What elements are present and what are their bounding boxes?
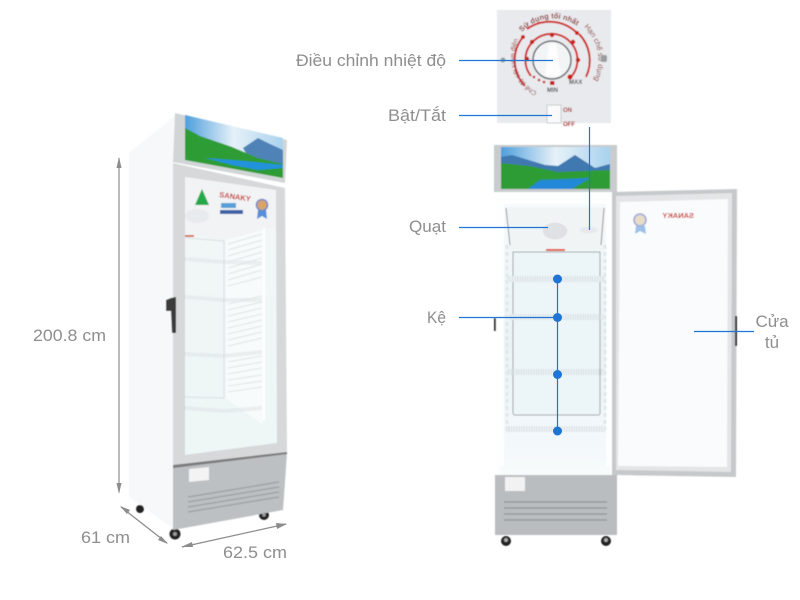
on off rocker switch: OFF xyxy=(563,122,575,128)
arrow: width xyxy=(181,523,287,547)
fridge side wall xyxy=(129,116,175,530)
back panel xyxy=(513,252,600,415)
label: fan: Quạt xyxy=(409,217,446,236)
side rails xyxy=(507,245,605,430)
dial text: MAX xyxy=(569,80,582,86)
dial scale ticks xyxy=(521,31,580,85)
label: door: Cửa xyxy=(755,312,789,331)
Sanaky logo and badges xyxy=(185,189,268,223)
label: on off: Bật/Tắt xyxy=(388,106,446,125)
door frame xyxy=(173,163,287,465)
wire shelves xyxy=(506,279,606,429)
header landscape picture xyxy=(185,115,283,178)
panel: left fridge front view xyxy=(129,113,287,540)
panel: control dial close-up xyxy=(497,10,611,128)
callout: shelf xyxy=(427,274,562,436)
dial scale arcs xyxy=(515,22,590,86)
base xyxy=(495,475,617,535)
interior back and shelves xyxy=(185,177,276,425)
label: shelf: Kệ xyxy=(427,308,446,327)
label: temperature adjust: Điều chỉnh nhiệt độ xyxy=(296,51,446,70)
dial knob xyxy=(533,41,571,79)
fan housing xyxy=(505,207,606,251)
door glass xyxy=(185,177,277,455)
dial text: Hạn chế sử dụng xyxy=(584,23,604,82)
dial text: Chế độ tiết kiệm điện xyxy=(510,38,536,96)
on off rocker switch: ON xyxy=(563,108,572,114)
control plate xyxy=(497,10,611,123)
base grille panel xyxy=(173,452,287,530)
shelf dots xyxy=(553,274,562,436)
dial text: Sử dụng tối nhất xyxy=(518,12,580,32)
label: depth: 61 cm xyxy=(81,528,130,547)
handle on cabinet xyxy=(494,318,496,331)
dial text: MIN xyxy=(547,88,558,94)
open door xyxy=(612,189,737,477)
cabinet bottom lip xyxy=(500,466,610,475)
header light box xyxy=(173,113,287,183)
Sanaky logo and badges: SANAKY xyxy=(219,190,251,203)
open door: SANAKY xyxy=(662,211,694,220)
screws xyxy=(500,55,607,62)
header box xyxy=(494,145,617,192)
panel: open fridge xyxy=(494,145,737,546)
on off rocker switch xyxy=(547,105,575,128)
wheels xyxy=(501,536,611,546)
interior xyxy=(504,204,606,474)
door handle xyxy=(166,297,176,333)
label: height: 200.8 cm xyxy=(33,326,106,345)
callout: fan xyxy=(409,127,590,236)
label: width: 62.5 cm xyxy=(223,543,287,562)
arrow: depth xyxy=(120,506,168,544)
label: door: tủ xyxy=(765,333,779,352)
arrow: height xyxy=(116,157,122,494)
cabinet body xyxy=(496,192,613,476)
wheels left fridge xyxy=(136,505,269,540)
callout: door xyxy=(694,312,789,352)
dial text xyxy=(510,12,604,96)
